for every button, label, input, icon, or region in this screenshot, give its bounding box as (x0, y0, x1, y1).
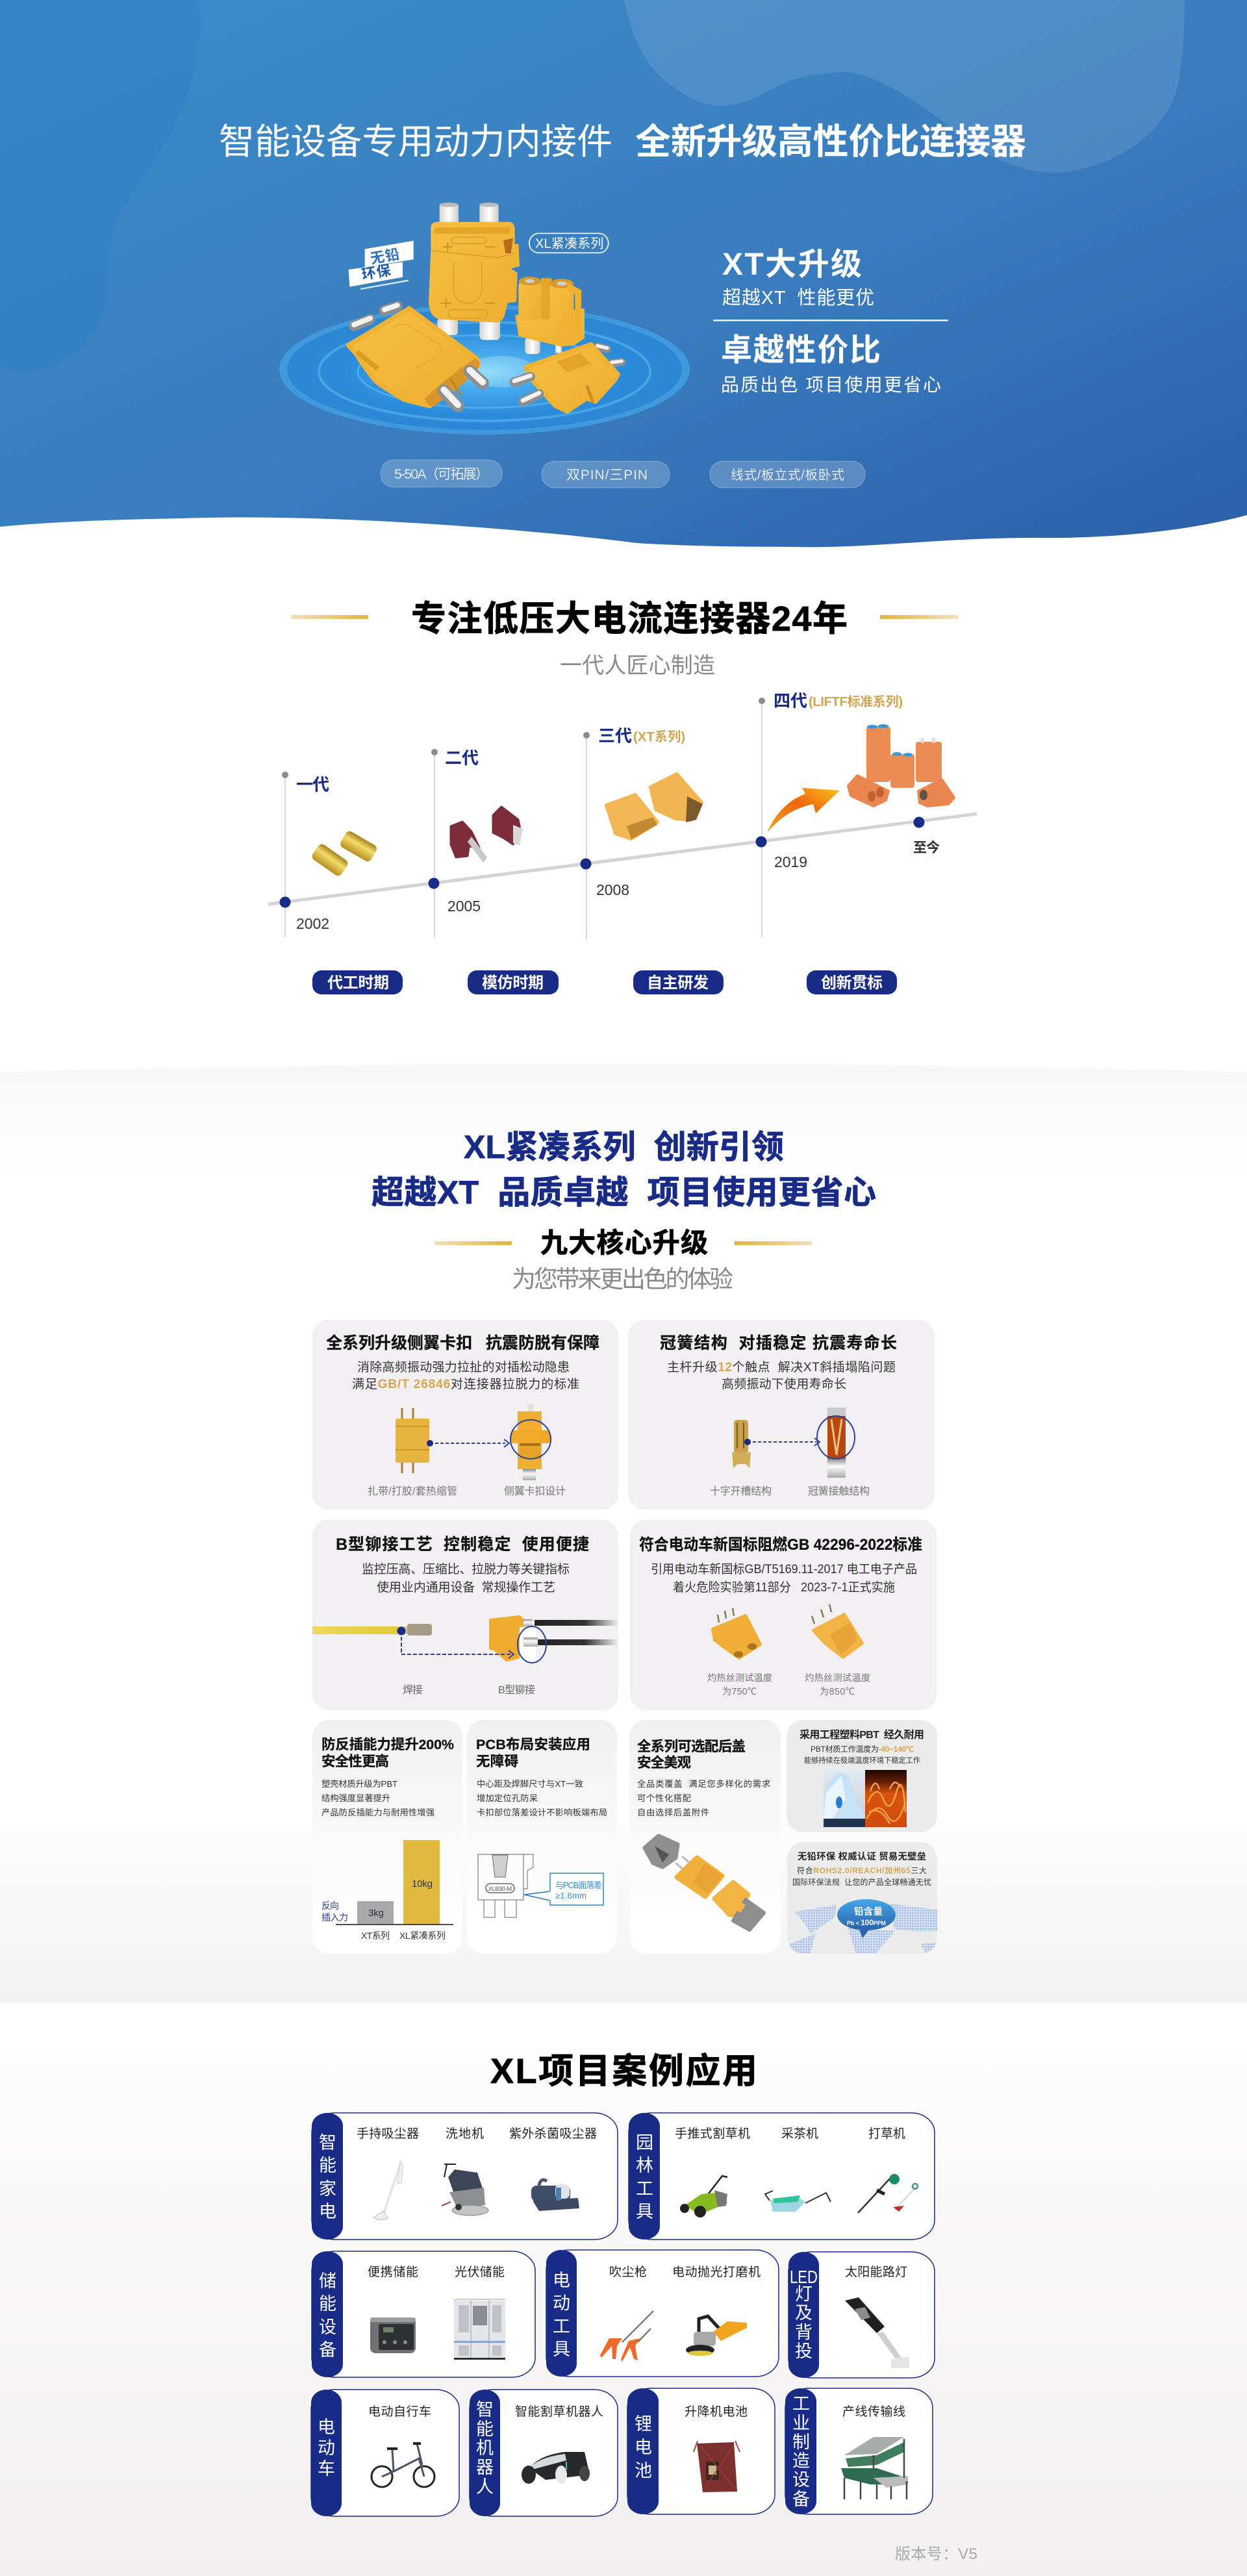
product: cable-tied connector (396, 1408, 429, 1473)
panel: flame retardant standard (630, 1520, 937, 1710)
badge: lead free (349, 241, 414, 289)
pill: OEM period (312, 970, 403, 994)
icon: folding e-bike (372, 2443, 435, 2487)
pill: OEM period: 代工时期 (327, 974, 389, 992)
panel: smart robots: 人 (476, 2477, 494, 2497)
heading: nine core upgrades (435, 1228, 812, 1258)
subheading: craftsmanship: 一代人匠心制造 (560, 653, 715, 678)
icon: electric polisher (686, 2316, 747, 2356)
panel: power tools: 工 (553, 2317, 570, 2336)
hero right feature text (713, 247, 948, 395)
pill: imitation period (468, 970, 559, 994)
panel: energy storage: 备 (319, 2340, 336, 2360)
panel: power tools: 电动抛光打磨机 (672, 2265, 761, 2279)
product: T plug connectors (451, 807, 523, 863)
panel: hero banner (0, 0, 1247, 547)
panel: energy storage (312, 2251, 535, 2377)
hero right feature text: 品质出色 项目使用更省心 (721, 375, 941, 395)
badge: lead free: 环保 (360, 262, 392, 283)
pill: current range (381, 460, 502, 487)
product: LIFTF orange connectors (848, 724, 954, 806)
panel: PCB layout: PCB布局安装应用 (476, 1736, 590, 1752)
label: generation four: (LIFTF标准系列) (809, 694, 903, 709)
panel: side wing clip (312, 1320, 618, 1509)
panel: PCB layout (467, 1720, 617, 1954)
panel: flame retardant standard: 灼热丝测试温度 (805, 1673, 870, 1684)
panel: smart appliances: 紫外杀菌吸尘器 (509, 2127, 597, 2141)
panel: optional rear cover: 全系列可选配后盖 (637, 1739, 746, 1754)
icon: air blow guns (600, 2311, 653, 2362)
panel: LED lighting: 投 (795, 2342, 812, 2361)
panel: side wing clip: 满足GB/T 26846对连接器拉脱力的标准 (352, 1377, 579, 1391)
panel: garden tools: 手推式割草机 (675, 2127, 750, 2141)
connector: right lying (514, 344, 622, 411)
heading: 24 years (291, 600, 958, 638)
callout: PCB drop: 与PCB面落差 (555, 1880, 602, 1890)
panel: lithium battery (627, 2388, 775, 2514)
pill: self R&D (633, 970, 724, 994)
panel: lead free compliance: 国际环保法规 让您的产品全球畅通无忧 (792, 1877, 931, 1887)
panel: industrial equipment: 产线传输线 (842, 2405, 905, 2419)
panel: optional rear cover: 自由选择后盖附件 (637, 1808, 709, 1817)
panel: crown spring: 冠簧结构 对插稳定 抗震寿命长 (660, 1333, 897, 1352)
panel: side wing clip: 侧翼卡扣设计 (504, 1485, 566, 1497)
panel: optional rear cover: 安全美观 (637, 1755, 691, 1771)
panel: anti reverse insertion: 结构强度显著提升 (321, 1793, 390, 1803)
panel: optional rear cover: 可个性化搭配 (637, 1793, 691, 1803)
panel: PBT material: PBT材质工作温度为-40~140℃ (811, 1744, 914, 1754)
label: XL series pill (529, 233, 609, 253)
icon: portable power station (370, 2317, 416, 2353)
panel: energy storage: 设 (319, 2317, 336, 2337)
diagram: PCB connector outline: XLB30-M (488, 1886, 512, 1892)
panel: electric vehicles: 车 (318, 2459, 335, 2479)
pill: innovation standard: 创新贯标 (821, 974, 883, 992)
panel: power tools: 电 (553, 2271, 570, 2290)
label: generation two: 二代 (445, 748, 479, 768)
year labels: 2002 (296, 915, 329, 932)
icon: PV storage cabinet (454, 2299, 505, 2360)
panel: crown spring: 高频振动下使用寿命长 (722, 1377, 846, 1391)
panel: crown spring: 主杆升级12个触点 解决XT斜插塌陷问题 (667, 1360, 896, 1374)
panel: smart appliances: 电 (319, 2202, 336, 2221)
arrow: dashed callout (427, 1420, 551, 1459)
product: crown spring contact (827, 1408, 846, 1478)
panel: industrial equipment: 设 (792, 2470, 810, 2490)
panel: electric vehicles: 动 (318, 2438, 335, 2458)
bar chart: reverse insertion force: 10kg (412, 1878, 433, 1889)
label: generation three: (XT系列) (633, 729, 685, 744)
year labels: 2019 (774, 853, 807, 870)
product: gold bullet contacts (310, 829, 378, 878)
label: generation four (774, 691, 903, 711)
panel: anti reverse insertion (312, 1720, 462, 1954)
icon: floor scrubber (442, 2164, 488, 2216)
panel: lithium battery: 升降机电池 (685, 2405, 748, 2419)
panel: garden tools: 工 (636, 2179, 653, 2199)
panel: side wing clip: 扎带/打胶/套热缩管 (368, 1485, 457, 1497)
panel: B-type crimping: 使用业内通用设备 常规操作工艺 (377, 1580, 555, 1595)
panel: LED lighting: 及 (795, 2303, 812, 2323)
product: connector with rear cover (645, 1836, 764, 1930)
bar chart: reverse insertion force (321, 1840, 453, 1941)
arrow: growth (767, 788, 840, 833)
panel: smart appliances (312, 2113, 618, 2240)
bar chart: reverse insertion force: XT系列 (361, 1930, 390, 1941)
panel: B-type crimping: B型铆接 (498, 1684, 535, 1696)
heading: application cases: XL项目案例应用 (490, 2052, 757, 2091)
icon: solar street light (845, 2297, 909, 2368)
pill: mount types (710, 461, 865, 488)
heading: nine core upgrades: 九大核心升级 (540, 1228, 708, 1258)
image: dotted world map (789, 1903, 937, 1954)
panel: flame retardant standard: 为750℃ (722, 1686, 757, 1697)
panel: flame retardant standard: 为850℃ (820, 1686, 855, 1697)
hero glowing platform (279, 305, 690, 435)
panel: PBT material: 能够持续在极端温度环境下稳定工作 (804, 1756, 920, 1765)
panel: optional rear cover: 全品类覆盖 满足您多样化的需求 (637, 1778, 770, 1789)
panel: B-type crimping: 焊接 (403, 1684, 423, 1696)
panel: industrial equipment: 制 (792, 2432, 810, 2452)
panel: smart robots: 能 (476, 2419, 494, 2439)
panel: flame retardant standard: 灼热丝测试温度 (707, 1673, 772, 1684)
panel: smart appliances: 手持吸尘器 (357, 2127, 419, 2141)
panel: smart robots: 智能割草机器人 (515, 2405, 603, 2419)
pill: imitation period: 模仿时期 (482, 974, 544, 992)
panel: PBT material (787, 1720, 937, 1832)
panel: flame retardant standard: 符合电动车新国标阻燃GB 42296-2022标准 (639, 1536, 922, 1554)
diagram: PCB connector outline (478, 1854, 533, 1917)
panel: smart robots: 机 (476, 2438, 494, 2458)
panel: lithium battery: 电 (635, 2438, 652, 2457)
panel: power tools (546, 2250, 779, 2377)
panel: PCB layout: 无障碍 (476, 1754, 518, 1769)
heading: XL compact series (372, 1129, 876, 1211)
connector: large upright (429, 203, 520, 340)
label: generation three (598, 726, 685, 746)
hero title (219, 121, 1026, 162)
chart: generation timeline (268, 691, 977, 939)
icon: UV vacuum (531, 2180, 579, 2211)
product: XT yellow connectors (607, 774, 703, 839)
icon: robot mower (522, 2452, 590, 2484)
label: generation three: 三代 (598, 726, 632, 746)
panel: PCB layout: 中心距及焊脚尺寸与XT一致 (477, 1779, 583, 1789)
hero right feature text: 卓越性价比 (721, 333, 881, 368)
hero right feature text: XT大升级 (722, 247, 862, 282)
pill: current range: 5-50A（可拓展） (394, 467, 489, 482)
panel: anti reverse insertion: 产品防反插能力与耐用性增强 (321, 1808, 435, 1817)
heading: XL compact series: XL紧凑系列 创新引领 (464, 1129, 784, 1165)
panel: lithium battery: 池 (635, 2461, 652, 2481)
arrow: dashed callout (397, 1626, 546, 1663)
panel: garden tools: 林 (636, 2156, 653, 2175)
pill: self R&D: 自主研发 (647, 974, 709, 992)
product: connector 750 degrees (712, 1608, 761, 1658)
heading: 24 years: 专注低压大电流连接器24年 (411, 600, 848, 638)
panel: PCB layout: 增加定位孔防呆 (477, 1793, 538, 1803)
panel: smart appliances: 家 (319, 2179, 336, 2199)
badge: lead free: 无铅 (369, 246, 401, 267)
panel: energy storage: 能 (319, 2294, 336, 2314)
bar chart: reverse insertion force: 反向 (321, 1900, 339, 1911)
text: version number: 版本号：V5 (895, 2545, 977, 2563)
panel: smart appliances: 能 (319, 2156, 336, 2175)
connector: left lying (349, 305, 483, 407)
product: wing clip connector (511, 1404, 550, 1480)
panel: garden tools: 打草机 (868, 2127, 905, 2141)
panel: PBT material: 采用工程塑料PBT 经久耐用 (800, 1729, 924, 1741)
panel: flame retardant standard: 引用电动车新国标GB/T5169.11-2017 电工电子产品 (651, 1562, 917, 1576)
panel: LED lighting: 太阳能路灯 (845, 2265, 907, 2279)
panel: LED lighting: 灯 (795, 2284, 812, 2304)
panel: crown spring: 十字开槽结构 (710, 1485, 772, 1497)
label: XL series pill: XL紧凑系列 (535, 236, 603, 251)
icon: lift battery (694, 2441, 740, 2492)
icon: stick vacuum (373, 2161, 403, 2220)
panel: lithium battery: 锂 (635, 2414, 652, 2434)
panel: industrial equipment: 工 (792, 2394, 810, 2414)
panel: smart robots (470, 2390, 618, 2516)
label: generation one: 一代 (296, 775, 329, 794)
panel: electric vehicles (311, 2390, 459, 2516)
panel: energy storage: 储 (319, 2271, 336, 2291)
badge: lead content: Pb < 100PPM (847, 1918, 886, 1927)
panel: B-type crimping: 监控压高、压缩比、拉脱力等关键指标 (362, 1562, 570, 1576)
connector: small upright (516, 277, 583, 354)
arrow: dashed callout (744, 1416, 855, 1459)
panel: crown spring (628, 1320, 935, 1509)
callout: PCB drop (524, 1873, 603, 1905)
badge: lead content (837, 1899, 896, 1938)
panel: LED lighting (788, 2252, 935, 2378)
panel: lead free compliance: 符合ROHS2.0/REACH/加州65三大 (797, 1865, 927, 1875)
hero connectors product group (349, 203, 622, 411)
panel: side wing clip: 消除高频振动强力拉扯的对插松动隐患 (357, 1360, 570, 1374)
panel: garden tools: 采茶机 (781, 2127, 818, 2141)
panel: industrial equipment: 造 (792, 2451, 810, 2471)
panel: industrial equipment: 业 (792, 2414, 810, 2433)
panel: power tools: 吹尘枪 (609, 2265, 647, 2279)
panel: industrial equipment (785, 2388, 933, 2514)
pill: pin count (542, 461, 670, 488)
panel: LED lighting: 背 (795, 2323, 812, 2342)
pill: pin count: 双PIN/三PIN (566, 468, 648, 483)
year labels: 至今 (913, 840, 940, 855)
panel: B-type crimping (312, 1520, 618, 1710)
panel: LED lighting: LED (790, 2267, 818, 2287)
panel: energy storage: 光伏储能 (455, 2265, 505, 2279)
year labels (296, 840, 940, 932)
product: crimped connector with black wires (490, 1617, 618, 1663)
icon: grass trimmers (858, 2174, 918, 2213)
year labels: 2008 (596, 881, 629, 898)
panel: lead free compliance: 无铅环保 权威认证 贸易无壁垒 (798, 1850, 926, 1862)
product: connector 850 degrees (812, 1604, 863, 1658)
panel: optional rear cover (629, 1720, 781, 1954)
panel: applications section background (0, 2002, 1247, 2576)
panel: anti reverse insertion: 防反插能力提升200% (321, 1737, 454, 1752)
hero title: 全新升级高性价比连接器 (635, 121, 1026, 162)
heading: XL compact series: 超越XT 品质卓越 项目使用更省心 (372, 1174, 876, 1211)
pill: mount types: 线式/板立式/板卧式 (731, 468, 844, 483)
panel: garden tools: 具 (636, 2202, 653, 2221)
callout: PCB drop: ≥1.6mm (555, 1891, 586, 1900)
panel: anti reverse insertion: 安全性更高 (321, 1753, 389, 1769)
hero right feature text: 超越XT 性能更优 (722, 287, 874, 309)
panel: power tools: 具 (553, 2340, 570, 2359)
panel: side wing clip: 全系列升级侧翼卡扣 抗震防脱有保障 (326, 1333, 599, 1352)
panel: PCB layout: 卡扣部位落差设计不影响板端布局 (477, 1808, 607, 1817)
panel: energy storage: 便携储能 (368, 2265, 418, 2279)
label: generation four: 四代 (774, 691, 807, 711)
panel: smart robots: 智 (476, 2400, 494, 2419)
panel: smart robots: 器 (476, 2458, 494, 2477)
panel: power tools: 动 (553, 2293, 570, 2313)
year labels: 2005 (447, 898, 481, 915)
panel: smart appliances: 智 (319, 2133, 336, 2153)
icon: lawn mower (680, 2176, 727, 2217)
icon: tea cutter (765, 2191, 831, 2212)
panel: upgrades section background (0, 1064, 1247, 2002)
panel: anti reverse insertion: 塑壳材质升级为PBT (321, 1779, 397, 1789)
panel: garden tools: 园 (636, 2133, 653, 2153)
image: iceberg and flame (824, 1770, 907, 1827)
panel: lead free compliance (787, 1842, 937, 1954)
panel: crown spring: 冠簧接触结构 (808, 1485, 870, 1497)
panel: smart appliances: 洗地机 (446, 2127, 484, 2141)
bar chart: reverse insertion force: XL紧凑系列 (399, 1930, 446, 1941)
panel: garden tools (629, 2113, 935, 2240)
panel: flame retardant standard: 着火危险实验第11部分 2023-7-1正式实施 (673, 1580, 895, 1595)
bar chart: reverse insertion force: 插入力 (321, 1912, 348, 1923)
panel: electric vehicles: 电动自行车 (368, 2405, 431, 2419)
subheading: experience: 为您带来更出色的体验 (512, 1266, 733, 1293)
product: cross slot contact (732, 1420, 751, 1468)
panel: B-type crimping: B型铆接工艺 控制稳定 使用便捷 (336, 1535, 589, 1554)
icon: conveyor line (841, 2437, 908, 2499)
product: welded yellow wire (312, 1624, 432, 1635)
panel: electric vehicles: 电 (318, 2418, 335, 2437)
bar chart: reverse insertion force: 3kg (368, 1908, 384, 1919)
badge: lead content: 铅含量 (854, 1906, 883, 1917)
pill: innovation standard (807, 970, 897, 994)
panel: industrial equipment: 备 (792, 2490, 810, 2509)
hero title: 智能设备专用动力内接件 (219, 121, 612, 162)
